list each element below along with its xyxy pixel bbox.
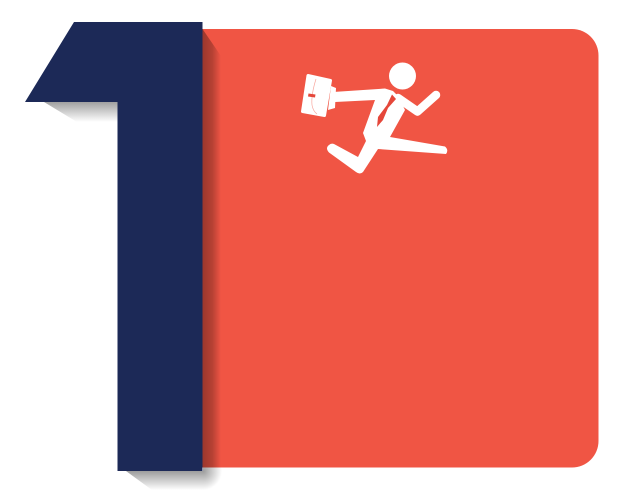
body, outstretched arm and legs — [327, 88, 447, 174]
panel: coral rounded card — [190, 29, 598, 468]
necktie — [377, 94, 396, 127]
shadow: under numeral base — [126, 468, 222, 490]
shadow: under numeral flag — [44, 102, 118, 122]
briefcase — [302, 76, 336, 116]
numeral one — [25, 22, 202, 471]
forward arm — [398, 95, 436, 112]
head — [389, 62, 416, 90]
shadow: navy bar cast onto card — [202, 29, 221, 468]
icon: running businessman with briefcase — [302, 62, 447, 174]
